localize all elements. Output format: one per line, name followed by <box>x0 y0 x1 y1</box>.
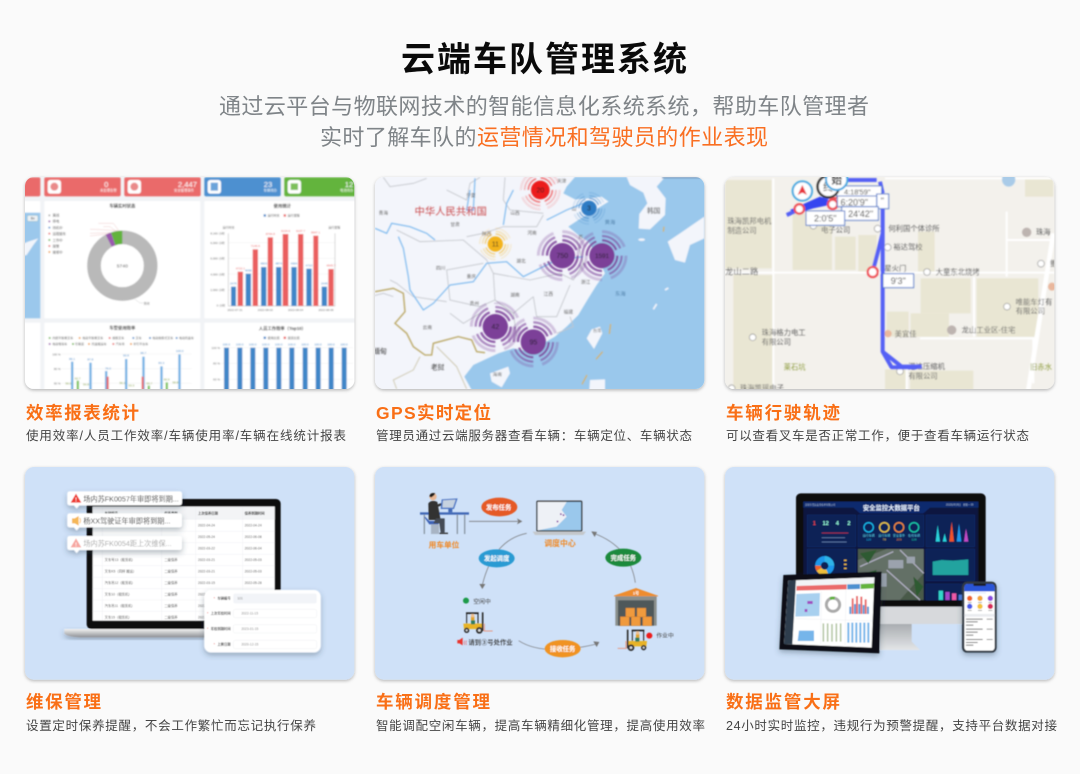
bar chart: model efficiency: 80 % <box>54 367 61 371</box>
bar chart: model efficiency: 55.7 <box>146 381 153 385</box>
alert bubble 1 <box>67 491 182 508</box>
map labels: 海南 <box>493 371 502 378</box>
subtitle line 2: 实时了解车队的运营情况和驾驶员的作业表现 <box>320 125 768 150</box>
bar chart: usage statistics: 8794.8 <box>266 232 275 236</box>
table text: 2022-04-24 <box>245 524 262 528</box>
caption: efficiency report: 使用效率/人员工作效率/车辆使用率/车辆在线统计报表 <box>26 428 346 443</box>
map labels: 河南 <box>527 230 537 236</box>
bar chart: model efficiency <box>44 323 200 393</box>
map labels: 陕西 <box>482 231 492 238</box>
sea and land <box>464 177 707 390</box>
table text: 2022 <box>198 604 206 608</box>
national border <box>375 288 485 355</box>
track time labels: 9'3'' <box>891 276 906 286</box>
donut chart: vehicle status <box>44 201 200 318</box>
map labels: 有限公司 <box>1016 307 1045 316</box>
donut chart: vehicle status: 维修中 <box>53 249 63 254</box>
bar chart: staff efficiency: 100.0 <box>327 342 335 346</box>
map labels: 珠海 <box>1036 228 1051 237</box>
icon: warehouse <box>614 588 658 626</box>
bar chart: usage statistics: 运行里程 <box>328 225 340 230</box>
donut chart: vehicle status: 待机中 <box>53 225 63 230</box>
map labels: 港达压缩机 <box>908 362 946 371</box>
bar chart: usage statistics: 运行时长 <box>223 225 235 230</box>
map mini panel <box>25 201 42 389</box>
cluster markers: 20 <box>536 187 544 194</box>
desktop monitor: 安全监控大数据平台 <box>863 503 920 512</box>
bar chart: model efficiency: 53.3 <box>128 384 135 388</box>
bar chart: staff efficiency: 100.0 <box>236 342 244 346</box>
maintenance form card: 2020-12-15 <box>241 642 259 646</box>
map labels: 电子公司 <box>821 226 850 235</box>
bar chart: model efficiency: 窄巷道 <box>75 341 84 346</box>
alert bubble 2 <box>67 513 182 530</box>
table text: 2022-03-15 <box>198 581 215 585</box>
bar chart: staff efficiency: 100.0 <box>340 342 348 346</box>
map labels: 重庆 <box>467 273 476 280</box>
table text <box>105 510 265 619</box>
pill: accept task: 接收任务 <box>550 644 576 653</box>
desktop monitor: 209 <box>897 538 902 542</box>
bar chart: model efficiency: 62.7 <box>75 377 81 381</box>
map labels: 旧赤水 <box>1030 362 1053 371</box>
maintenance form card: * <box>207 612 209 616</box>
bar chart: staff efficiency: 100.0 <box>275 342 283 346</box>
table text: 叉车号13（租赁机） <box>105 557 135 562</box>
desktop monitor: 120 <box>866 538 871 542</box>
province borders <box>370 177 583 389</box>
title: 云端车队管理系统 <box>401 41 687 79</box>
bar chart: usage statistics: 2022-08-04 <box>288 308 304 312</box>
pill: start dispatch: 发起调度 <box>484 554 510 563</box>
table text: 2022-06-08 <box>245 535 262 539</box>
map labels: 黄海 <box>605 218 616 226</box>
cluster markers <box>471 171 626 366</box>
caption: GPS: 管理员通过云端服务器查看车辆：车辆定位、车辆状态 <box>376 428 692 443</box>
bar chart: usage statistics: 4710 <box>306 263 313 267</box>
maintenance form card: * <box>214 596 216 600</box>
donut chart: vehicle status: 远程锁车 <box>53 231 67 236</box>
bar chart: staff efficiency: 使用比值 <box>268 335 280 340</box>
alert bubble 3: ! <box>75 542 77 548</box>
desktop monitor: 128 <box>912 538 917 542</box>
bar chart: model efficiency: 56.0 <box>65 382 72 386</box>
map labels: 大童东北烧烤 <box>936 267 980 276</box>
table text: 二级保养 <box>164 569 178 574</box>
bar chart: usage statistics: 4056 <box>245 268 252 272</box>
navigation pin icons: 始 <box>831 173 842 186</box>
table text: 2022-03-22 <box>198 547 215 551</box>
bar chart: model efficiency: 叉车 <box>136 335 142 340</box>
track time labels <box>806 186 914 288</box>
table text: 二级保养 <box>164 614 178 619</box>
cluster markers: 1591 <box>595 253 610 260</box>
table text: 2022-05-28 <box>245 581 262 585</box>
bar chart: model efficiency: 汽车吊 <box>116 341 125 346</box>
map labels: 有限公司 <box>908 371 938 380</box>
maintenance form card: 2022-11-15 <box>241 612 258 616</box>
bar chart: model efficiency: 托盘搬运车 <box>92 341 107 346</box>
maintenance form card: * <box>214 642 216 646</box>
track time labels: 4:18'59'' <box>844 188 871 197</box>
bar chart: model efficiency: 电动堆垛车 <box>52 341 67 346</box>
table text: 二级保养 <box>164 591 178 596</box>
KPI tiles: 电池待办 <box>340 188 354 193</box>
status: idle <box>463 597 491 605</box>
bar chart: usage statistics: 运行时长 <box>268 213 280 218</box>
table text: 2022-06-04 <box>245 547 262 551</box>
arrow: complete task <box>591 531 635 583</box>
alert bubble 1: ! <box>75 498 77 504</box>
map labels: 缅甸 <box>373 347 387 356</box>
bar chart: usage statistics: 6,000 小时 <box>210 240 225 245</box>
bar chart: staff efficiency: 100.0 <box>314 342 322 346</box>
bar chart: model efficiency: 60 % <box>54 382 61 386</box>
maintenance form card: * <box>207 627 209 631</box>
bar chart: model efficiency: 83.3 <box>158 361 165 365</box>
call notice: 请到③号处作业 <box>468 637 513 646</box>
bar chart: model efficiency: 100.0 <box>176 349 184 353</box>
status: working: 作业中 <box>656 632 674 640</box>
KPI tiles: 未处理告警 <box>100 188 117 193</box>
map labels: 鲍 <box>1050 259 1058 268</box>
icon: idle forklift <box>463 612 493 634</box>
track stop markers <box>795 178 878 277</box>
desktop monitor: 安全事件 <box>893 532 905 537</box>
map mini panel: Bx <box>31 217 35 221</box>
arrow: accept task <box>519 641 599 650</box>
donut chart: vehicle status: 离线 <box>53 213 60 218</box>
table text: 2022-03-21 <box>198 570 215 574</box>
bar chart: usage statistics: 2,000 小时 <box>210 287 225 292</box>
bar chart: model efficiency: 93.8 <box>123 354 129 358</box>
map labels: 浙江 <box>581 278 591 285</box>
cluster markers: 3 <box>587 206 591 213</box>
track time labels: 6:20'9'' <box>841 197 868 207</box>
navigation pin icons <box>790 177 850 202</box>
maintenance form card: 101 <box>237 596 243 600</box>
bar chart: usage statistics: 6,000 小时 <box>210 256 225 261</box>
status: working <box>646 632 674 640</box>
pill: complete task: 完成任务 <box>611 553 637 562</box>
table text: 保养类型 <box>164 510 178 515</box>
icon: warehouse: 1号 <box>633 589 639 595</box>
bar chart: usage statistics: 4904 <box>291 262 298 266</box>
bar chart: usage statistics: 运行里程 <box>288 213 300 218</box>
bar chart: usage statistics: 2022-08-06 <box>318 308 334 312</box>
map labels: 有限公司 <box>762 337 791 346</box>
bar chart: model efficiency: 电动前移式叉车 <box>152 335 173 340</box>
bar chart: model efficiency: 前移叉车 <box>112 335 124 340</box>
desktop monitor: 1 <box>813 521 816 527</box>
bar chart: model efficiency: 100 % <box>52 352 61 356</box>
bar chart: staff efficiency <box>204 323 358 393</box>
bar chart: staff efficiency: 60 % <box>213 378 220 382</box>
map labels: 东海 <box>615 290 626 298</box>
bar chart: staff efficiency: 80 % <box>213 362 220 366</box>
alert bubble 2: 杨XX驾驶证年审即将到期... <box>83 516 170 525</box>
heading: maintenance: 维保管理 <box>26 692 102 712</box>
icon: dispatcher at desk <box>420 493 469 534</box>
bar chart: model efficiency: 89.1 <box>69 357 75 361</box>
bar chart: usage statistics: 2445 <box>321 281 328 285</box>
track time labels: 2:0'5'' <box>814 214 837 224</box>
bar chart: staff efficiency: 100.0 <box>301 342 309 346</box>
call notice: (( <box>464 640 467 646</box>
bar chart: model efficiency: 76.0 <box>105 366 111 370</box>
map title label: 中华人民共和国 <box>415 205 487 218</box>
table text: 2022 <box>198 615 206 619</box>
arrow: start dispatch <box>479 533 527 589</box>
map labels: 贵州 <box>470 300 479 307</box>
pill: publish task <box>481 498 517 516</box>
donut chart: vehicle status: 工作中 <box>53 237 63 242</box>
panel: dispatch <box>375 467 704 680</box>
table text: 二级保养 <box>164 580 178 585</box>
KPI tiles: 0 <box>104 180 108 189</box>
map labels: 台湾 <box>593 327 601 333</box>
alert bubble 3: 场内苏FK0054距上次维保... <box>83 539 172 548</box>
map labels: 珠海凯邦电机 <box>727 217 772 226</box>
cluster markers: 11 <box>492 241 499 248</box>
navigation pin icons: 终 <box>823 181 834 194</box>
maintenance form card: 年检到期时间 <box>211 626 231 631</box>
table text: 2022-05-24 <box>198 535 215 539</box>
status: idle: 空闲中 <box>473 597 491 605</box>
map labels: 龙山二路 <box>725 267 759 277</box>
tablet <box>779 572 882 653</box>
map labels: 唯能车灯有 <box>1016 297 1052 306</box>
map labels: 天津 <box>557 177 567 184</box>
caption: monitoring: 24小时实时监控，违规行为预警提醒，支持平台数据对接 <box>726 718 1057 733</box>
bar chart: model efficiency: 56.1 <box>119 381 126 385</box>
map labels: 裕达驾校 <box>893 242 923 251</box>
bar chart: usage statistics: 2022-07-31 <box>227 308 243 312</box>
table text: 汽车吊12（租赁机） <box>105 580 135 585</box>
map labels: 美宜佳 <box>895 329 917 338</box>
map labels: 制造公司 <box>727 226 757 235</box>
map labels: 江西 <box>544 291 553 298</box>
desktop monitor: 2 <box>847 521 851 527</box>
panel: efficiency report <box>20 177 361 393</box>
bar chart: staff efficiency: 100 % <box>212 346 220 350</box>
cluster markers: 750 <box>557 253 568 260</box>
maintenance form card: 车辆编号 <box>217 595 231 600</box>
bar chart: usage statistics: 8,160 小时 <box>210 231 225 236</box>
table text: 叉车K5（同样 搬运） <box>105 569 136 574</box>
desktop monitor: 78 <box>883 538 886 542</box>
map labels <box>725 217 1058 393</box>
map labels: 韩国 <box>647 206 661 215</box>
table text: 车辆编号 <box>105 510 119 515</box>
icon: laptop with map <box>533 501 586 535</box>
bar chart: usage statistics: 4874 <box>275 262 282 266</box>
panel: monitoring screens <box>725 467 1054 680</box>
donut chart: vehicle status: 5740 <box>117 263 128 269</box>
caption: maintenance: 设置定时保养提醒，不会工作繁忙而忘记执行保养 <box>26 718 316 733</box>
bar chart: usage statistics: 使用统计 <box>274 203 292 210</box>
map labels: 山西 <box>510 209 520 216</box>
smartphone <box>962 582 997 653</box>
bar chart: model efficiency: 54.8 <box>83 382 89 386</box>
map labels: 福建 <box>564 308 573 315</box>
maintenance form card: 上次年检时间 <box>211 611 231 616</box>
table text: 2022-05-03 <box>245 570 262 574</box>
bar chart: usage statistics: 4645.7 <box>326 264 336 268</box>
icon: busy forklift <box>618 630 647 651</box>
desktop monitor: 12 <box>823 521 829 527</box>
laptop <box>64 499 281 637</box>
bar chart: model efficiency: 96.7 <box>140 351 147 355</box>
table text: 上次保养日期 <box>198 510 219 515</box>
call notice <box>457 637 513 646</box>
table text: 2022 <box>198 592 206 596</box>
bar chart: model efficiency: 60.9 <box>164 378 170 382</box>
bar chart: staff efficiency: 100.0 <box>262 342 270 346</box>
bar chart: model efficiency: 内燃平衡重叉车 <box>52 335 73 340</box>
map labels: 云南 <box>423 324 432 331</box>
pill: accept task <box>545 640 581 657</box>
map labels: 珠海凯瑶电子 <box>740 384 784 393</box>
caption: driving track: 可以查看叉车是否正常工作，便于查看车辆运行状态 <box>726 428 1029 443</box>
track time labels: '' <box>881 196 884 206</box>
table text: 叉车10（租赁机） <box>105 591 132 596</box>
donut chart: vehicle status: 停电 <box>53 219 60 224</box>
bar chart: usage statistics: 4,000 小时 <box>210 271 225 276</box>
caption: dispatch: 智能调配空闲车辆，提高车辆精细化管理，提高使用效率 <box>376 718 705 733</box>
arrow: publish to dispatch center <box>469 518 522 524</box>
bar chart: staff efficiency: 人员工作效率（Top10） <box>259 325 306 332</box>
KPI tiles <box>20 177 361 196</box>
desktop monitor <box>796 493 986 650</box>
map labels: 何利国个体诊所 <box>888 224 940 233</box>
bar chart: usage statistics: 8947.1 <box>311 230 321 234</box>
map labels: 青海 <box>379 210 388 217</box>
KPI tiles: 安全管理事件 <box>174 188 195 193</box>
map blocks and roads <box>725 172 1054 390</box>
KPI tiles: 23 <box>264 180 272 189</box>
donut chart: vehicle status: 离线 <box>144 300 150 305</box>
map labels: 湖南 <box>510 292 520 299</box>
table text: 二级保养 <box>164 557 178 562</box>
pill: start dispatch <box>479 549 515 567</box>
desktop monitor: 2022年8月8日 星期一 09 <box>946 503 974 507</box>
bar chart: model efficiency: 58.8 <box>172 380 179 384</box>
bar chart: usage statistics: 4722.1 <box>236 266 245 270</box>
heading: driving track: 车辆行驶轨迹 <box>726 403 840 423</box>
bar chart: usage statistics <box>204 201 358 318</box>
table text: 2022-04-24 <box>198 524 215 528</box>
table text: 2022-03-21 <box>198 558 215 562</box>
bar chart: usage statistics: 9134.6 <box>281 229 291 233</box>
bar chart: staff efficiency: 100.0 <box>249 342 257 346</box>
bar chart: model efficiency: 车型使用效率 <box>109 325 136 332</box>
bar chart: usage statistics: 4903 <box>260 262 267 266</box>
desktop monitor: 在线车辆 <box>908 532 920 537</box>
bar chart: model efficiency: 87.8 <box>87 358 94 362</box>
map labels: 甘肃 <box>450 221 460 228</box>
map labels: 苏 <box>578 233 583 240</box>
map labels: 莱石坑 <box>784 363 806 372</box>
cluster markers: 95 <box>529 339 537 346</box>
route line <box>787 180 922 367</box>
maintenance form card: 上牌日期 <box>217 641 231 646</box>
map labels <box>373 177 661 378</box>
map labels: 珠海格力电工 <box>762 328 806 337</box>
label: vehicle user: 用车单位 <box>429 540 460 550</box>
bar chart: usage statistics: 7146.6 <box>251 244 260 248</box>
table text: 汽车吊11（租赁机） <box>105 603 135 608</box>
heading: dispatch: 车辆调度管理 <box>376 692 490 712</box>
alert bubble 1: 场内苏FK0057年审即将到期... <box>83 494 179 503</box>
label: dispatch center: 调度中心 <box>544 538 576 548</box>
bar chart: model efficiency: 电动平衡重叉车 <box>82 335 103 340</box>
alert bubble 3 <box>67 536 182 553</box>
donut chart: vehicle status: 报警 <box>53 243 60 248</box>
desktop monitor: 运行车辆 <box>863 532 875 537</box>
panel: driving track <box>725 169 1058 393</box>
bar chart: usage statistics: 9137.7 <box>296 229 306 233</box>
bar chart: staff efficiency: 100.0 <box>223 342 230 346</box>
table text: 二级保养 <box>164 603 178 608</box>
desktop monitor: 4 <box>836 521 840 527</box>
KPI tiles: 车辆待办 <box>264 188 278 193</box>
maintenance form card: 2023-01-15 <box>241 627 259 631</box>
map labels: 宁夏 <box>466 192 476 198</box>
bar chart: usage statistics: 0 小时 <box>217 303 225 308</box>
panel: maintenance <box>25 467 354 680</box>
map labels: 龙山工业区-住宅 <box>962 326 1015 335</box>
map labels: 山 <box>572 206 577 213</box>
heading: monitoring: 数据监管大屏 <box>726 692 840 712</box>
KPI tiles: 12 <box>345 180 353 189</box>
KPI tiles: 2,447 <box>178 180 197 189</box>
rivers <box>375 178 583 310</box>
map labels: 四川 <box>436 266 446 271</box>
track time labels: 24'42'' <box>848 209 874 219</box>
heading: efficiency report: 效率报表统计 <box>26 403 139 423</box>
table text: 保养到期时间 <box>245 510 265 515</box>
subtitle line 1: 通过云平台与物联网技术的智能信息化系统系统，帮助车队管理者 <box>219 94 869 119</box>
bar chart: usage statistics: 2022-08-02 <box>258 308 273 312</box>
bar chart: model efficiency: 牵引平台车 <box>133 341 148 346</box>
cluster markers: 42 <box>491 324 499 331</box>
bar chart: staff efficiency: 载货比值 <box>288 335 300 340</box>
bar chart: model efficiency: 电动托盘车 <box>179 335 194 340</box>
desktop monitor: 深圳市货运安全技术有限公司 <box>805 503 836 507</box>
desktop monitor: 运行车辆 <box>878 532 890 537</box>
map labels: 湖北 <box>516 257 526 264</box>
map labels: 老挝 <box>431 362 445 371</box>
table text: 叉车15（租赁机） <box>105 614 132 619</box>
panel: GPS map <box>370 171 707 390</box>
pill: complete task <box>605 549 641 567</box>
table text: 2022-05-03 <box>245 558 262 562</box>
heading: GPS: GPS实时定位 <box>376 403 491 423</box>
donut chart: vehicle status: 车辆实时状态 <box>109 203 136 210</box>
maintenance form card <box>204 590 321 652</box>
map labels: 星火门 <box>884 264 906 273</box>
bar chart: usage statistics: 2475 <box>230 281 237 285</box>
bar chart: staff efficiency: 100.0 <box>288 342 296 346</box>
pill: publish task: 发布任务 <box>486 502 512 511</box>
